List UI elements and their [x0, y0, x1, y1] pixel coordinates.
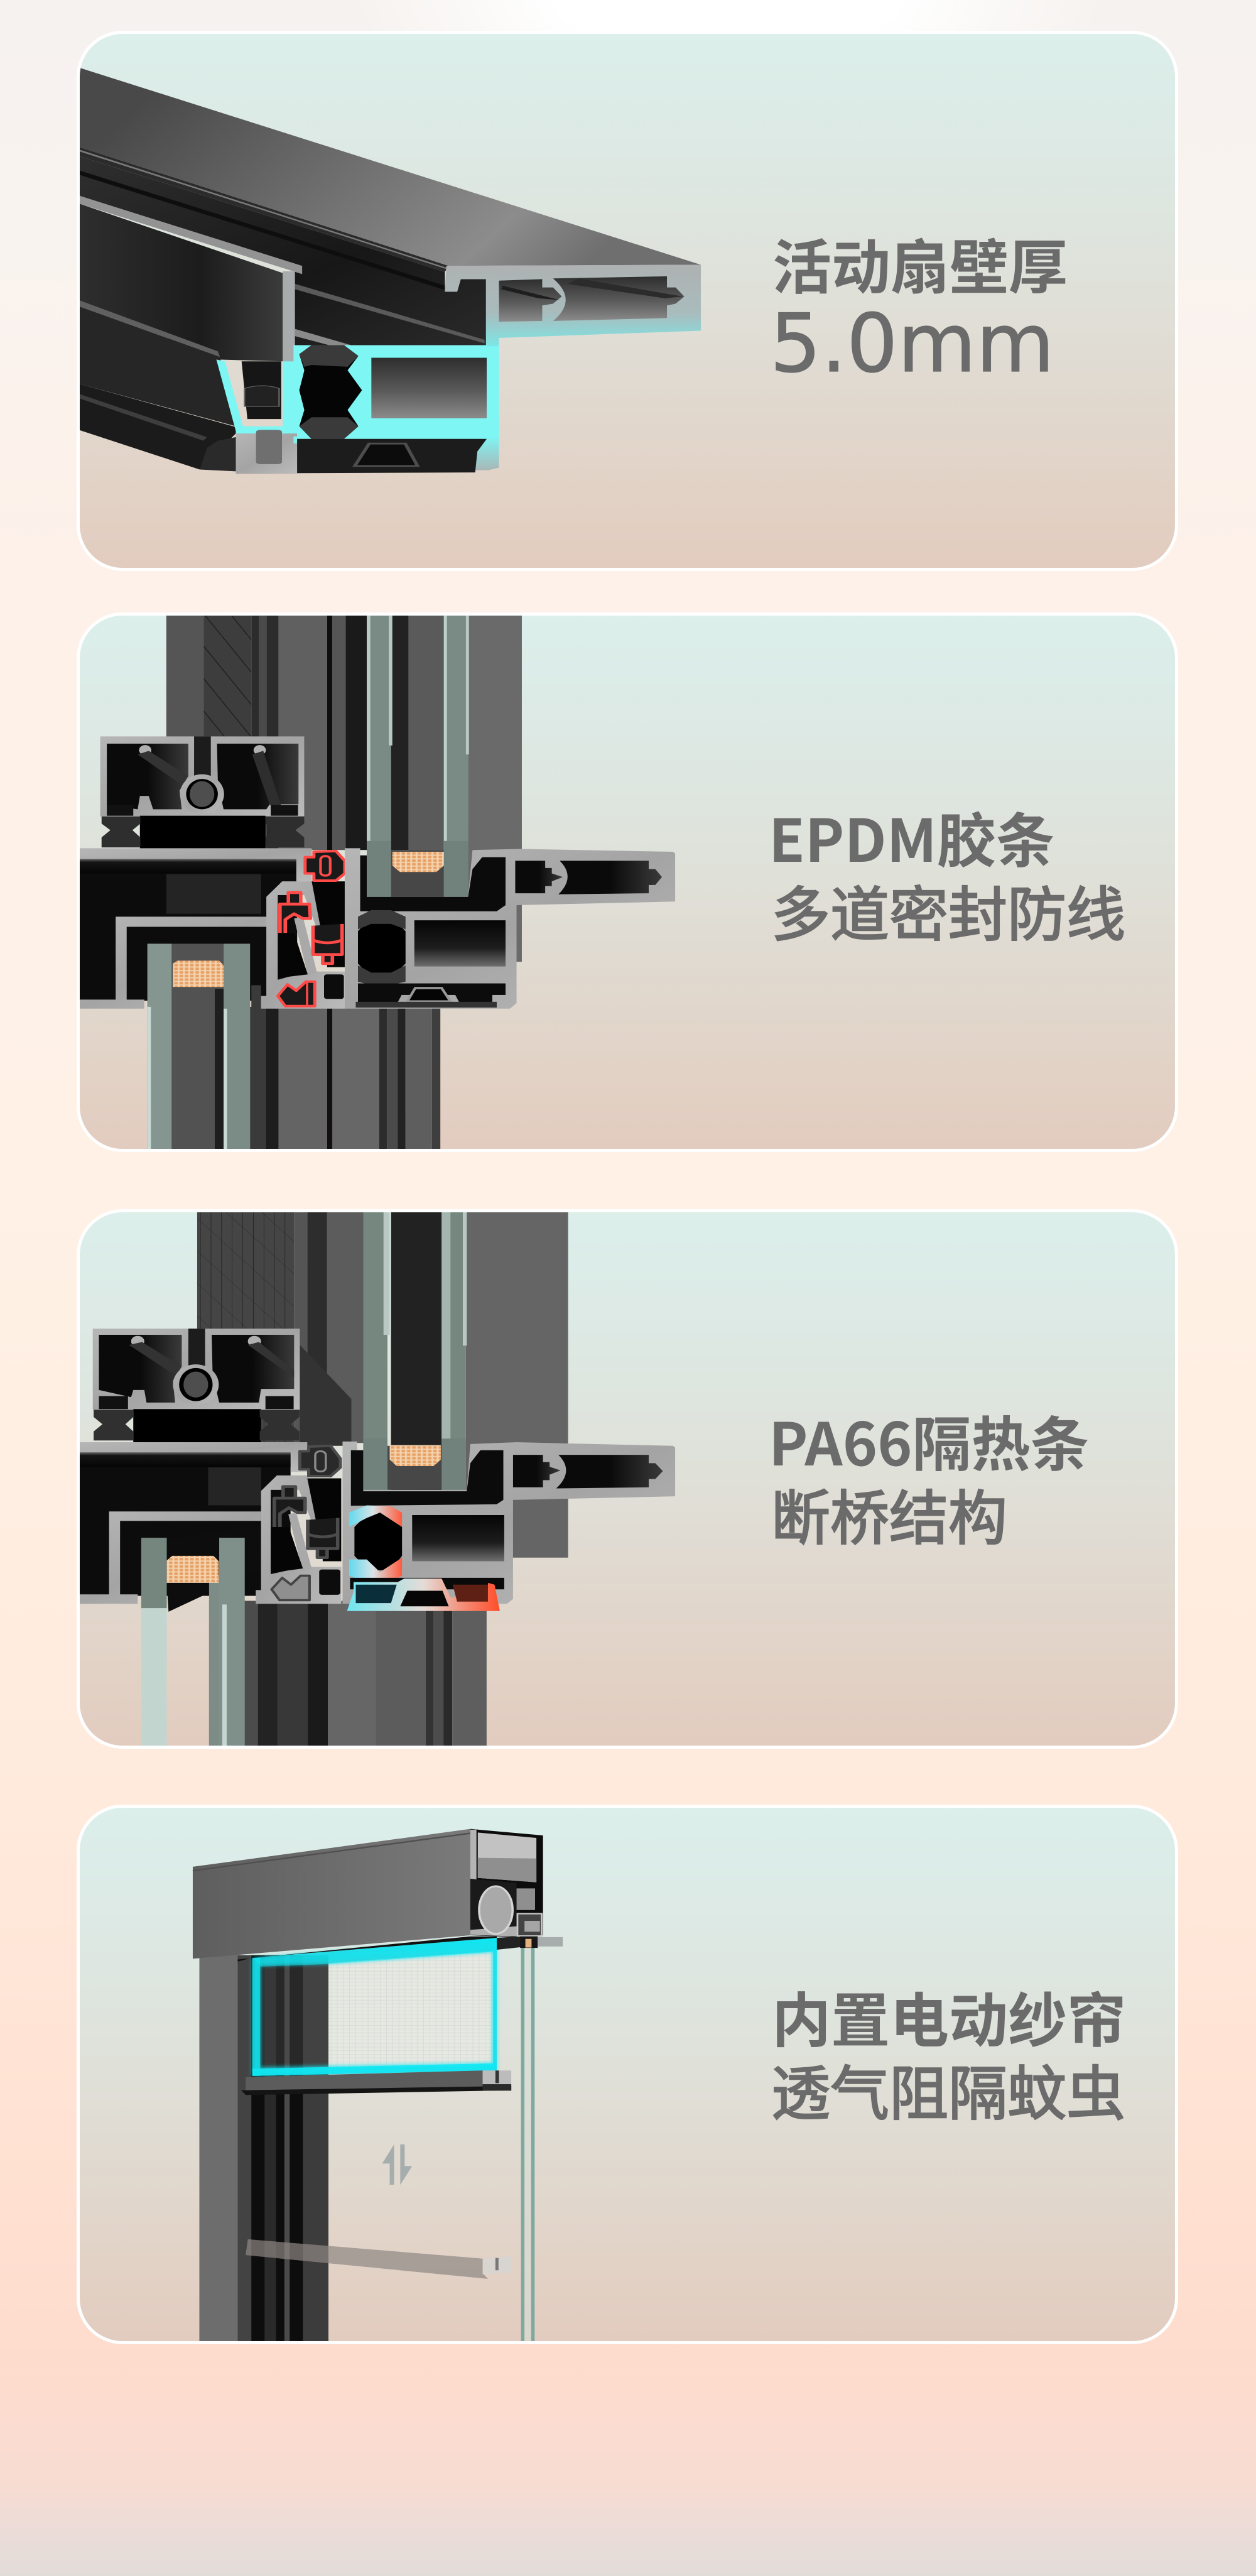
middle column [261, 881, 345, 1009]
top twin profile [93, 1329, 300, 1410]
arrows: up and down [382, 2144, 412, 2185]
number: 5.0mm: 5.0mm [770, 297, 1054, 391]
right frame [345, 848, 675, 1009]
header box [193, 1829, 470, 1959]
text: 透气阻隔蚊虫: 透气阻隔蚊虫 [771, 2046, 1125, 2132]
left sash [79, 1452, 291, 1596]
red gaskets [305, 851, 345, 881]
profile: section view with red EPDM gaskets [79, 616, 675, 1151]
panel: built-in electric screen [77, 1805, 1178, 2344]
heading: EPDM胶条: EPDM胶条 [769, 794, 1055, 879]
dark slab [300, 1345, 351, 1446]
lower verticals [209, 1601, 262, 1747]
upper flange [445, 264, 701, 346]
back verticals [166, 616, 203, 850]
header cross section [470, 1829, 543, 1937]
post [199, 1955, 238, 2343]
middle column [256, 1475, 341, 1604]
lower verticals [250, 1007, 266, 1151]
panel: PA66 thermal break [77, 1209, 1178, 1749]
screen [252, 1938, 497, 2076]
panel: EPDM gasket [77, 612, 1178, 1152]
heading: 活动扇壁厚: 活动扇壁厚 [772, 220, 1068, 306]
text: 断桥结构: 断桥结构 [771, 1471, 1007, 1557]
glass [521, 1939, 524, 2343]
grey gaskets [300, 1446, 340, 1476]
top twin profile [100, 736, 304, 817]
back verticals [197, 1212, 294, 1443]
left sash [79, 858, 297, 1001]
thermal strips [349, 1506, 402, 1527]
right frame [342, 1442, 675, 1604]
heading: 内置电动纱帘: 内置电动纱帘 [772, 1974, 1126, 2059]
profile: 3D aluminium sash with cyan wall highlight [78, 67, 701, 474]
text: 多道密封防线: 多道密封防线 [771, 867, 1125, 953]
bottom rail [246, 2070, 484, 2090]
illustration: window frame with motorised insect screen [193, 1829, 563, 2343]
profile: section view with PA66 thermal strips [79, 1212, 675, 1747]
heading: PA66隔热条: PA66隔热条 [769, 1398, 1090, 1483]
panel: sash wall thickness [77, 31, 1178, 571]
ghost rail [246, 2239, 488, 2279]
lower section [293, 345, 499, 437]
